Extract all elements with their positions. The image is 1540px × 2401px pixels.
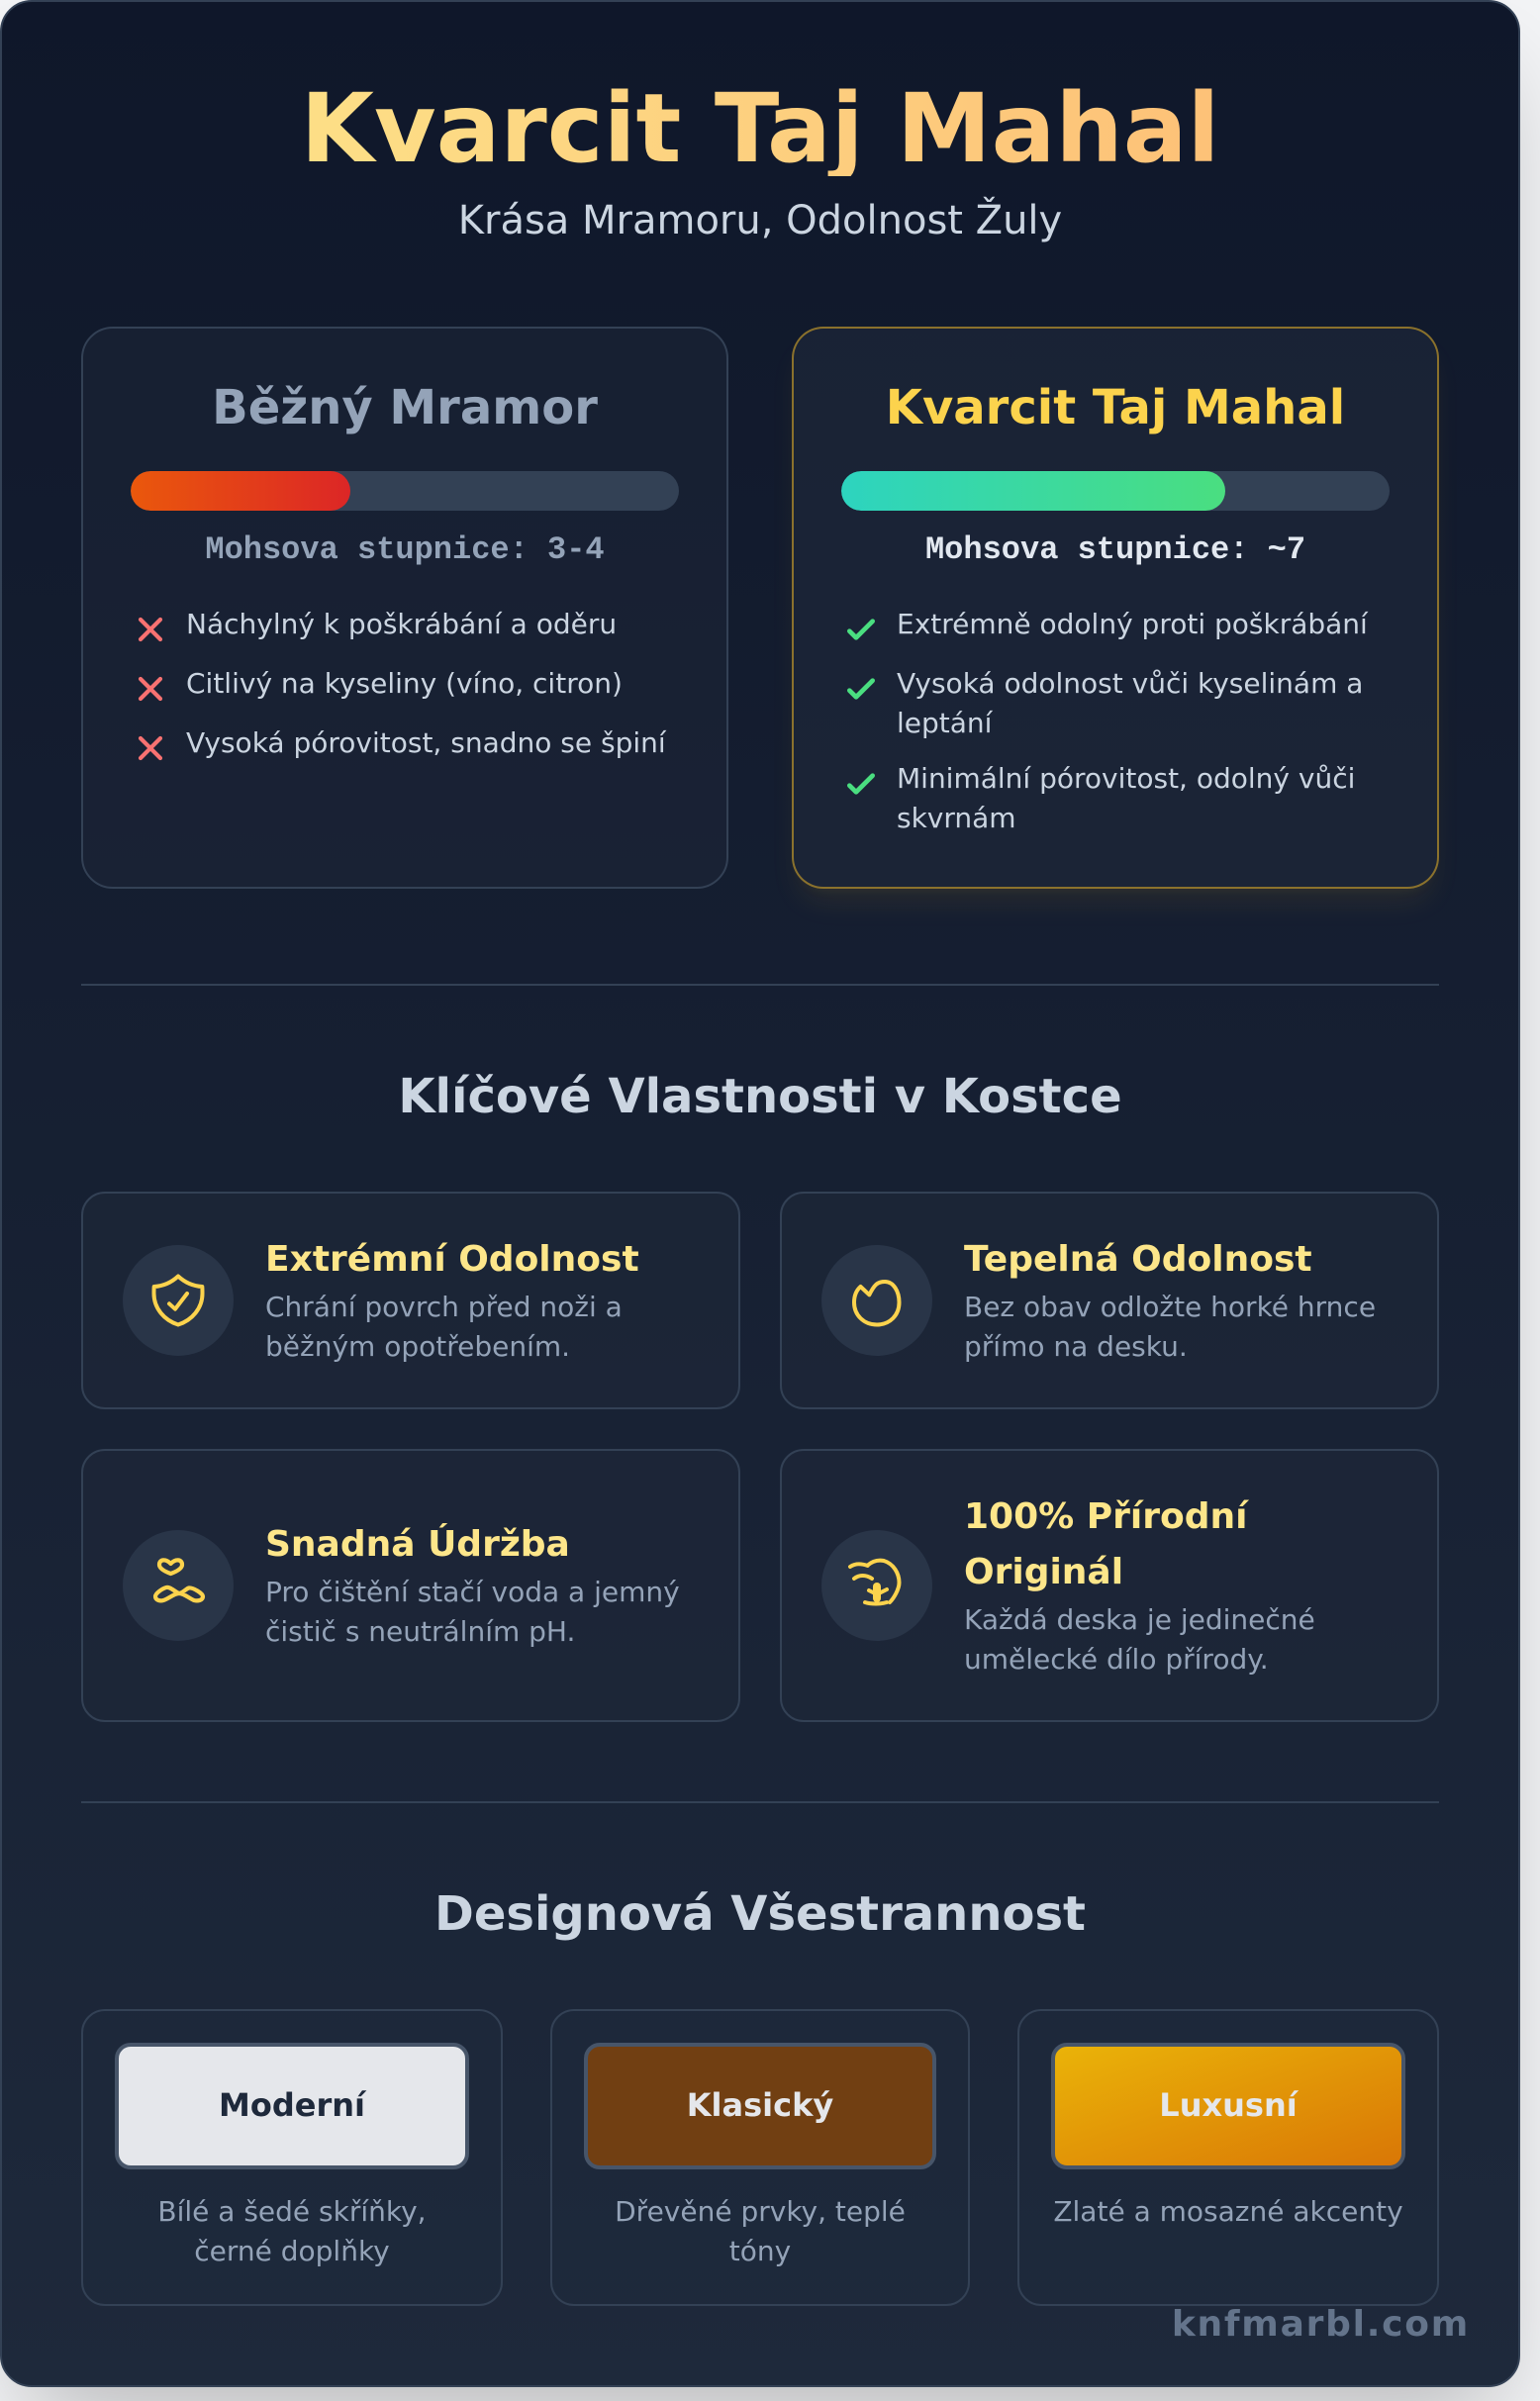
- list: marble drawbacks: [139, 608, 667, 760]
- card: classic: [550, 2009, 970, 2306]
- description: classic: tóny: [729, 2235, 791, 2267]
- description: modern: Bílé a šedé skříňky,: [157, 2195, 427, 2228]
- swatch: luxury: Luxusní: [1159, 2086, 1298, 2124]
- card: extreme resistance: [81, 1192, 740, 1409]
- drawback item 2: Citlivý na kyseliny (víno, citron): [186, 667, 623, 700]
- card: modern: [81, 2009, 503, 2306]
- text: natural original: Originál: [964, 1552, 1123, 1592]
- heading: common marble: Běžný Mramor: [212, 380, 598, 435]
- card: easy maintenance: [81, 1449, 740, 1722]
- description: classic: Dřevěné prvky, teplé: [615, 2195, 906, 2228]
- panel: Taj Mahal quartzite: [792, 327, 1439, 889]
- text: easy maintenance: Pro čištění stačí voda a jemný: [265, 1576, 680, 1608]
- Mohs value: marble: Mohsova stupnice: 3-4: [205, 531, 605, 568]
- text: extreme resistance: běžným opotřebením.: [265, 1330, 570, 1363]
- description: classic: [615, 2195, 906, 2267]
- drawback item 3: Vysoká pórovitost, snadno se špiní: [186, 726, 666, 759]
- text: heat resistance: [964, 1239, 1376, 1363]
- text: extreme resistance: Extrémní Odolnost: [265, 1239, 639, 1280]
- text: extreme resistance: Chrání povrch před noži a: [265, 1291, 623, 1323]
- Mohs value: quartzite: Mohsova stupnice: ~7: [925, 531, 1305, 568]
- text: natural original: umělecké dílo přírody.: [964, 1643, 1269, 1676]
- hardness bar: marble: [131, 471, 679, 511]
- text: heat resistance: Tepelná Odolnost: [964, 1239, 1312, 1280]
- subtitle: Krása Mramoru, Odolnost Žuly: [458, 198, 1062, 243]
- heading: design versatility: Designová Všestrannost: [434, 1886, 1086, 1942]
- swatch: classic: [584, 2043, 936, 2169]
- text: natural original: 100% Přírodní: [964, 1496, 1247, 1537]
- watermark: knfmarbl.com: [1172, 2304, 1470, 2345]
- swatch: luxury: [1051, 2043, 1405, 2169]
- text: easy maintenance: [265, 1523, 680, 1648]
- benefit item 2: [847, 667, 1363, 739]
- text: natural original: [964, 1496, 1315, 1676]
- swatch: classic: Klasický: [687, 2086, 833, 2124]
- icon: care: [123, 1530, 234, 1641]
- heading: quartzite: Kvarcit Taj Mahal: [886, 380, 1345, 435]
- description: modern: černé doplňky: [194, 2235, 390, 2267]
- title: [81, 81, 1439, 176]
- benefit item 1: Extrémně odolný proti poškrábání: [897, 608, 1368, 640]
- description: modern: [157, 2195, 427, 2267]
- hardness bar: quartzite: [841, 471, 1390, 511]
- description: luxury: Zlaté a mosazné akcenty: [1053, 2195, 1403, 2228]
- design styles row: [81, 2009, 1439, 2306]
- icon: nature: [821, 1530, 932, 1641]
- drawback item 1: Náchylný k poškrábání a oděru: [186, 608, 617, 640]
- benefit item 3: skvrnám: [897, 802, 1016, 834]
- list: quartzite benefits: [847, 608, 1368, 834]
- benefit item 2: Vysoká odolnost vůči kyselinám a: [897, 667, 1363, 700]
- key properties grid: [81, 1192, 1439, 1722]
- panel: common marble: [81, 327, 728, 889]
- text: natural original: Každá deska je jedinečné: [964, 1603, 1315, 1636]
- card: heat resistance: [780, 1192, 1439, 1409]
- heading: key properties: Klíčové Vlastnosti v Kostce: [398, 1069, 1122, 1124]
- icon: flame: [821, 1245, 932, 1356]
- benefit item 3: [847, 762, 1355, 834]
- comparison panels: [81, 327, 1439, 903]
- icon: shield: [123, 1245, 234, 1356]
- title: Kvarcit Taj Mahal: [301, 73, 1219, 184]
- text: extreme resistance: [265, 1239, 639, 1363]
- text: easy maintenance: čistič s neutrálním pH.: [265, 1615, 575, 1648]
- card: luxury: [1017, 2009, 1439, 2306]
- text: easy maintenance: Snadná Údržba: [265, 1524, 570, 1565]
- text: heat resistance: Bez obav odložte horké hrnce: [964, 1291, 1376, 1323]
- text: heat resistance: přímo na desku.: [964, 1330, 1188, 1363]
- card: natural original: [780, 1449, 1439, 1722]
- swatch: modern: [115, 2043, 469, 2169]
- benefit item 3: Minimální pórovitost, odolný vůči: [897, 762, 1355, 795]
- benefit item 2: leptání: [897, 707, 992, 739]
- swatch: modern: Moderní: [219, 2086, 365, 2124]
